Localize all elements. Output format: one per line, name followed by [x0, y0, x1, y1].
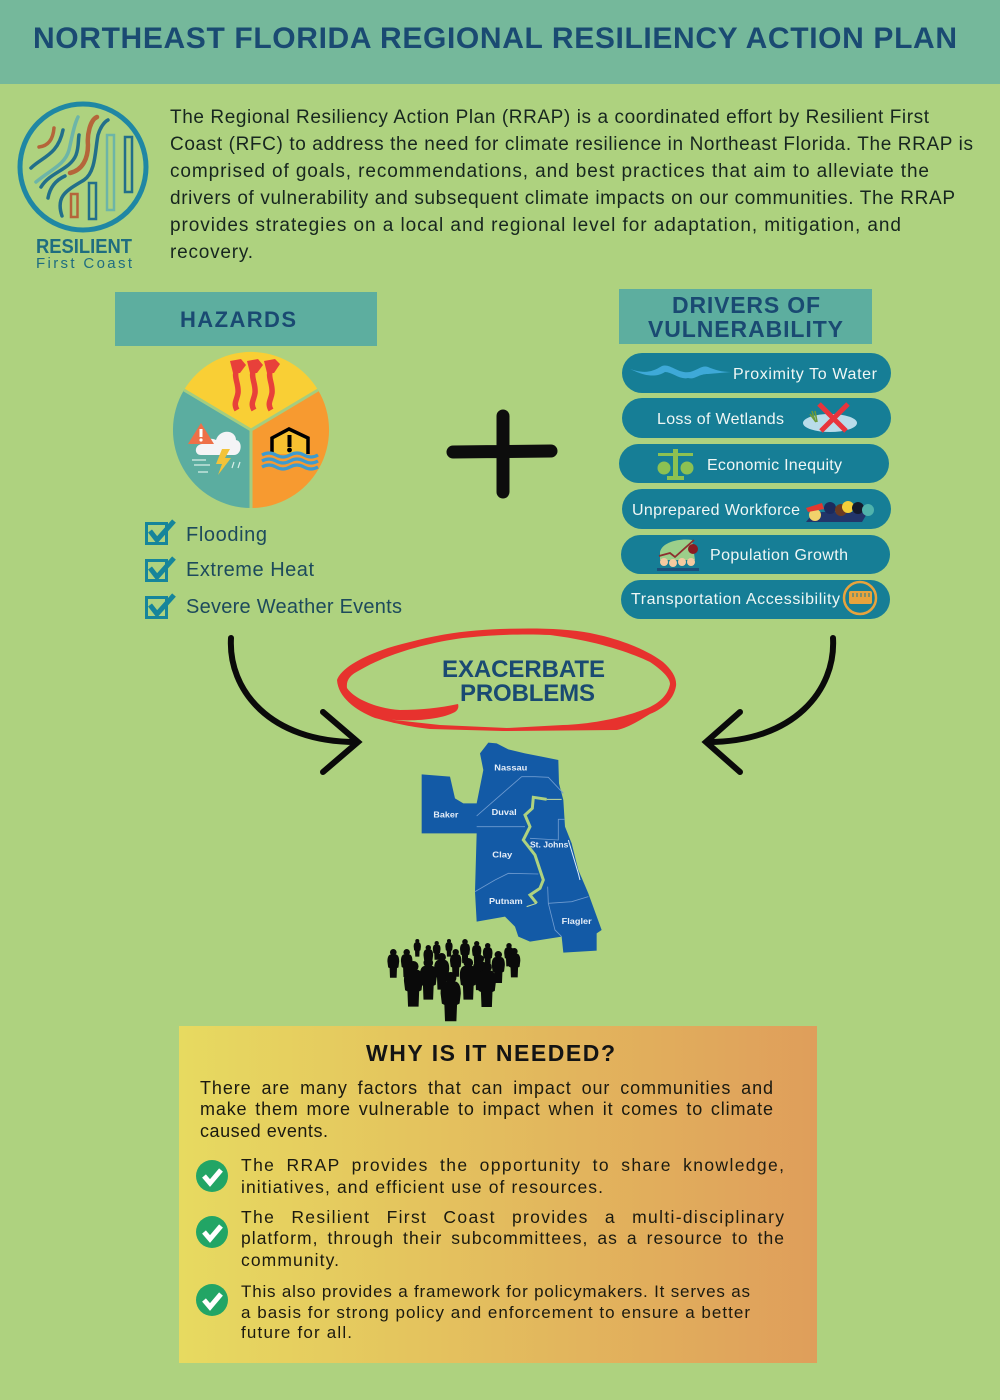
logo: Resilient First Coast: RESILIENT [36, 236, 132, 258]
hazards pie [173, 352, 329, 508]
heading: hazards: HAZARDS [180, 307, 296, 332]
logo: Resilient First Coast [20, 104, 146, 272]
item: framework for policymakers: future for all. [241, 1323, 352, 1342]
arrow: drivers to problems [706, 638, 833, 772]
intro paragraph: comprised of goals, recommendations, and best practices that aim to alleviate the [170, 161, 929, 182]
pill: unprepared workforce [622, 489, 891, 529]
why paragraph: There are many factors that can impact our communities and [200, 1078, 773, 1098]
item: multi-disciplinary platform [196, 1207, 784, 1270]
pill: proximity to water [622, 353, 891, 393]
item: multi-disciplinary platform: The Resilient First Coast provides a multi-disciplinary [241, 1207, 784, 1227]
pill: economic inequity [619, 444, 889, 483]
checklist: severe weather events: Severe Weather Events [186, 596, 402, 618]
icon: extreme heat [230, 359, 280, 410]
plus sign [453, 416, 551, 492]
map: northeast Florida counties: Duval [492, 807, 517, 817]
icon: flooded house [262, 429, 318, 469]
map: northeast Florida counties: Putnam [489, 896, 523, 906]
panel: why is it needed [179, 1026, 817, 1363]
intro paragraph [170, 107, 973, 263]
item: share knowledge: The RRAP provides the opportunity to share knowledge, [241, 1155, 784, 1175]
intro paragraph: Coast (RFC) to address the need for climate resilience in Northeast Florida. The RRAP is [170, 134, 973, 155]
map: northeast Florida counties [422, 743, 602, 953]
heading: why is it needed: WHY IS IT NEEDED? [366, 1040, 615, 1066]
heading: drivers of vulnerability: VULNERABILITY [648, 316, 843, 342]
item: framework for policymakers [196, 1282, 750, 1342]
map: northeast Florida counties: Flagler [562, 916, 592, 926]
why paragraph: make them more vulnerable to impact when it comes to climate [200, 1099, 773, 1119]
item: share knowledge [196, 1155, 784, 1197]
intro paragraph: The Regional Resiliency Action Plan (RRAP) is a coordinated effort by Resilient First [170, 107, 930, 128]
checklist: extreme heat: Extreme Heat [186, 559, 314, 581]
logo: Resilient First Coast: First Coast [36, 255, 133, 272]
intro paragraph: drivers of vulnerability and subsequent climate impacts on our communities. The RRAP [170, 188, 955, 209]
why paragraph [200, 1078, 773, 1141]
heading: drivers of vulnerability [619, 289, 872, 344]
item: multi-disciplinary platform: platform, through their subcommittees, as a resource to the [241, 1228, 784, 1248]
icon: crowd of people [387, 939, 520, 1021]
pill: transportation accessibility: Transportation Accessibility [631, 591, 840, 608]
heading: drivers of vulnerability: DRIVERS OF [672, 292, 820, 318]
map: northeast Florida counties: Nassau [494, 763, 527, 773]
item: framework for policymakers: a basis for strong policy and enforcement to ensure a better [241, 1303, 750, 1322]
heading: hazards [115, 292, 377, 346]
item: multi-disciplinary platform: community. [241, 1250, 339, 1270]
callout: exacerbate problems: EXACERBATE [442, 656, 605, 683]
arrow: hazards to problems [231, 638, 358, 772]
map: northeast Florida counties: Clay [492, 849, 513, 859]
intro paragraph: recovery. [170, 242, 253, 263]
pill: population growth [621, 535, 890, 574]
hazards checklist [146, 521, 402, 618]
pill: transportation accessibility [621, 580, 890, 619]
pill: population growth: Population Growth [710, 547, 848, 564]
intro paragraph: provides strategies on a local and regional level for adaptation, mitigation, and [170, 215, 901, 236]
header banner [0, 0, 1000, 84]
icon: severe weather [188, 423, 241, 475]
map: northeast Florida counties: St. Johns [530, 840, 569, 850]
item: framework for policymakers: This also provides a framework for policymakers. It serves as [241, 1282, 750, 1301]
checklist: flooding: Flooding [186, 524, 267, 546]
checklist: flooding [146, 521, 267, 546]
pill: loss of wetlands: Loss of Wetlands [657, 411, 784, 428]
pill: loss of wetlands [622, 398, 891, 438]
callout: exacerbate problems [337, 628, 676, 731]
item: share knowledge: initiatives, and efficient use of resources. [241, 1177, 603, 1197]
map: northeast Florida counties: Baker [433, 809, 459, 819]
why paragraph: caused events. [200, 1121, 328, 1141]
pill: proximity to water: Proximity To Water [733, 366, 878, 383]
title: NORTHEAST FLORIDA REGIONAL RESILIENCY ACTION PLAN [33, 22, 957, 55]
callout: exacerbate problems: PROBLEMS [460, 680, 595, 707]
pill: unprepared workforce: Unprepared Workforce [632, 502, 800, 519]
pill: economic inequity: Economic Inequity [707, 457, 842, 474]
